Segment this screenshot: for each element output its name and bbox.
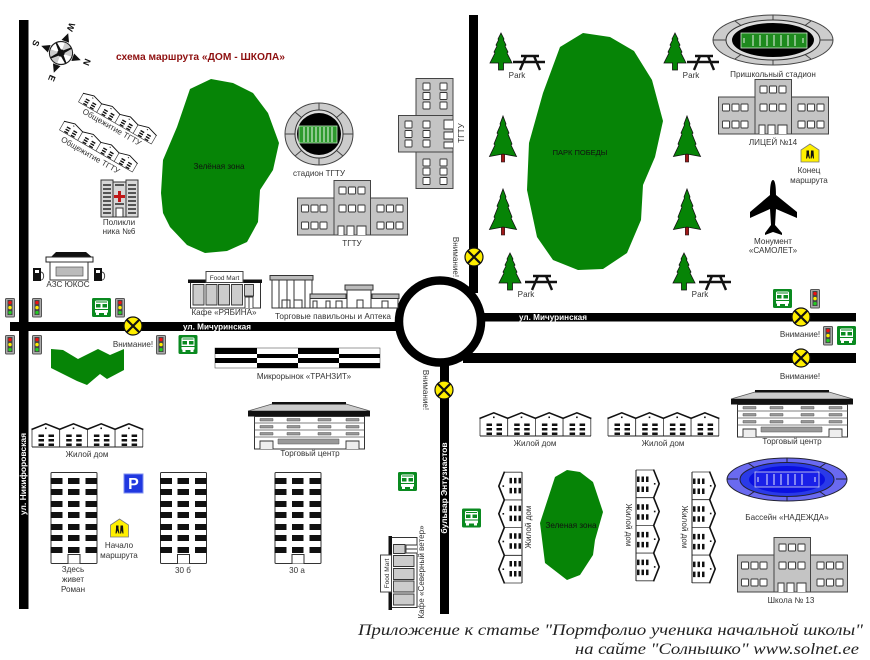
road: бульвар Энтузиастов: бульвар Энтузиастов — [439, 442, 449, 534]
start of route sign — [110, 519, 128, 537]
monument label — [749, 237, 798, 255]
houses label: Жилой дом — [514, 439, 556, 448]
crossing sign — [465, 248, 483, 266]
cafe ryabina: Food Mart — [210, 275, 240, 282]
vertical houses — [692, 472, 715, 583]
dormitory 1 — [78, 90, 158, 144]
apartment label: Роман — [61, 585, 85, 594]
houses — [480, 413, 591, 436]
rotated building TGTU — [398, 78, 453, 188]
vertical houses label: Жилой дом — [680, 506, 689, 548]
pool label: Бассейн «НАДЕЖДА» — [745, 513, 829, 522]
traffic light — [6, 298, 14, 317]
tree — [674, 116, 700, 162]
attention label: Внимание! — [421, 370, 430, 410]
lyceum label: ЛИЦЕЙ №14 — [749, 138, 798, 147]
road: ул. Мичуринская west: ул. Мичуринская — [183, 322, 251, 332]
road: ул. Мичуринская east — [482, 312, 856, 322]
park 2: Park — [683, 71, 700, 80]
bus stop — [92, 298, 111, 317]
park 4 — [673, 253, 731, 299]
bus stop — [178, 335, 198, 354]
end of route label: маршрута — [790, 176, 828, 185]
road: ул. Мичуринская east: ул. Мичуринская — [519, 312, 587, 322]
park pobedy: ПАРК ПОБЕДЫ — [553, 148, 608, 157]
apartment label: 30 а — [289, 566, 305, 575]
end of route sign — [801, 144, 819, 162]
tree — [490, 116, 516, 162]
compass: W — [64, 21, 77, 33]
building TGTU — [298, 180, 408, 235]
road: ул. Мичуринская west — [10, 322, 400, 332]
cafe ryabina — [188, 272, 262, 308]
pavilions — [270, 276, 399, 308]
compass: E — [46, 73, 58, 83]
shopping center — [731, 390, 853, 437]
roundabout — [399, 280, 481, 362]
school stadium label: Пришкольный стадион — [730, 70, 816, 79]
monument airplane — [750, 180, 797, 235]
vertical houses — [499, 472, 522, 584]
green zone small: Зеленая зона — [545, 521, 597, 530]
school stadium — [713, 15, 833, 65]
market transit — [215, 348, 380, 368]
houses label: Жилой дом — [66, 450, 108, 459]
crossing sign — [792, 349, 810, 367]
traffic light — [810, 290, 820, 308]
park 4: Park — [692, 290, 709, 299]
green zone small — [540, 470, 603, 580]
houses — [608, 413, 719, 436]
green zone: Зелёная зона — [193, 162, 245, 171]
park 2 — [664, 33, 719, 80]
gas station label: АЗС ЮКОС — [46, 280, 90, 289]
compass: S — [30, 38, 42, 48]
cafe label: Кафе «РЯБИНА» — [191, 308, 257, 317]
end of route label — [790, 166, 828, 185]
school 13 label: Школа № 13 — [768, 596, 815, 605]
shopping center label: Торговый центр — [762, 437, 822, 446]
shopping center — [248, 402, 370, 449]
monument label: «САМОЛЕТ» — [749, 246, 798, 255]
footer caption: Приложение к статье "Портфолио ученика начальной школы" — [357, 622, 863, 639]
end of route label: Конец — [798, 166, 821, 175]
vertical houses label: Жилой дом — [624, 504, 633, 546]
park pobedy — [527, 33, 663, 270]
monument label: Монумент — [754, 237, 792, 246]
park 1 — [490, 33, 545, 80]
footer caption — [357, 622, 863, 658]
compass: N — [81, 57, 93, 67]
parking sign: P — [128, 476, 139, 493]
road: бульвар Энтузиастов — [439, 360, 449, 614]
rotated label TGTU: ТГТУ — [457, 122, 466, 143]
cafe north wind — [380, 536, 417, 610]
market label: Микрорынок «ТРАНЗИТ» — [257, 372, 352, 381]
footer caption: на сайте "Солнышко" www.solnet.ee — [575, 641, 859, 658]
hospital label — [103, 218, 136, 236]
park 3 — [499, 253, 557, 299]
tree — [674, 189, 700, 235]
apartment label: живет — [62, 575, 84, 584]
apartment label — [61, 565, 85, 594]
park 3: Park — [518, 290, 535, 299]
hospital — [101, 180, 138, 217]
bus stop — [837, 326, 856, 345]
park 1: Park — [509, 71, 526, 80]
shopping center label: Торговый центр — [280, 449, 340, 458]
cafe north wind: Food Mart — [384, 558, 391, 588]
bus stop — [773, 289, 792, 308]
dormitory 2 — [59, 118, 139, 172]
cafe north wind label: Кафе «Северный ветер» — [417, 525, 426, 619]
apartment label: 30 б — [175, 566, 191, 575]
apartment label: Здесь — [62, 565, 84, 574]
start of route label — [100, 541, 138, 560]
start of route label: маршрута — [100, 551, 138, 560]
title: схема маршрута «ДОМ - ШКОЛА» — [116, 52, 285, 63]
bus stop — [462, 508, 481, 528]
houses — [32, 424, 143, 447]
hospital label: Поликли — [103, 218, 135, 227]
stadium TGTU label: стадион ТГТУ — [293, 169, 346, 178]
green wave area — [51, 349, 124, 385]
traffic light — [32, 298, 42, 317]
apartment block — [274, 472, 321, 564]
school 13 — [738, 538, 848, 592]
pavilions label: Торговые павильоны и Аптека — [275, 312, 392, 321]
crossing sign — [124, 317, 142, 335]
compass — [30, 21, 93, 83]
attention label: Внимание! — [780, 330, 820, 339]
parking sign — [124, 474, 143, 493]
road: ул. Никифоровская: ул. Никифоровская — [18, 433, 28, 515]
attention label: Внимание! — [113, 340, 153, 349]
traffic light — [6, 336, 14, 354]
attention label: Внимание! — [451, 237, 460, 277]
lyceum building — [718, 80, 828, 134]
building TGTU label: ТГТУ — [342, 239, 363, 248]
stadium TGTU — [285, 103, 353, 165]
houses label: Жилой дом — [642, 439, 684, 448]
hospital label: ника №6 — [103, 227, 136, 236]
road: east lower — [463, 353, 856, 363]
tree — [490, 189, 516, 235]
apartment block — [160, 472, 206, 564]
start of route label: Начало — [105, 541, 134, 550]
traffic light — [32, 336, 42, 354]
dormitory 2 label: Общежитие ТГТУ — [59, 135, 122, 176]
green zone — [161, 79, 279, 253]
traffic light — [156, 336, 166, 354]
traffic light — [824, 326, 832, 345]
crossing sign — [435, 381, 453, 399]
gas station — [33, 252, 105, 281]
crossing sign — [792, 308, 810, 326]
bus stop — [398, 472, 417, 491]
vertical houses label: Жилой дом — [524, 506, 533, 548]
attention label: Внимание! — [780, 372, 820, 381]
traffic light — [116, 298, 124, 317]
apartment block — [50, 472, 97, 564]
dormitory 1 label: Общежитие ТГТУ — [81, 107, 143, 148]
road: ул. Никифоровская — [18, 20, 28, 609]
vertical houses — [636, 470, 659, 581]
pool nadezhda — [727, 458, 847, 501]
road: north vertical — [469, 15, 478, 293]
